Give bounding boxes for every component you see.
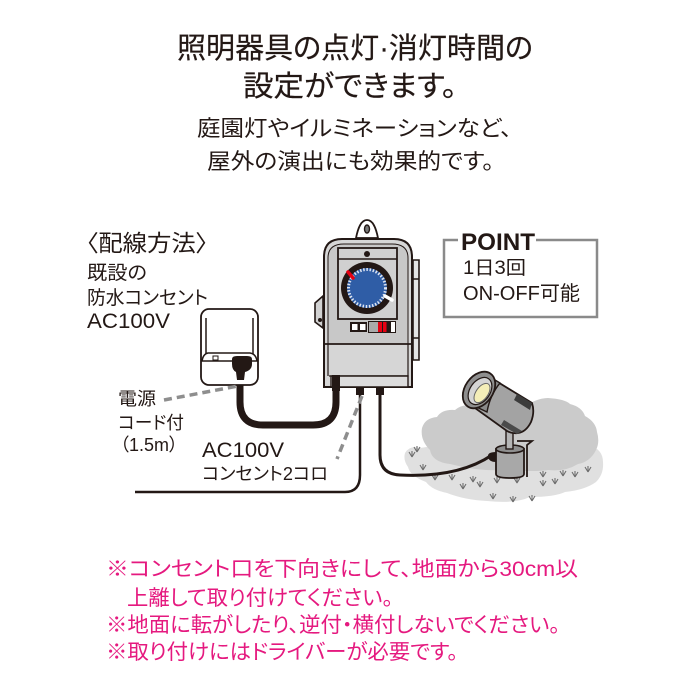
caution notes: ※コンセント口を下向きにして、地面から30cm以 — [106, 558, 578, 581]
wiring method label — [86, 230, 208, 333]
light cable — [380, 392, 492, 475]
caution notes: ※取り付けにはドライバーが必要です。 — [106, 641, 458, 664]
icon: plug — [232, 356, 252, 380]
icon: hanger — [356, 220, 378, 238]
power cord label: 電源 — [118, 389, 156, 409]
point callout: POINT — [461, 229, 535, 256]
wiring method label: 既設の — [87, 263, 147, 284]
title: 照明器具の点灯·消灯時間の — [177, 32, 533, 65]
outlet label: コンセント2コロ — [202, 464, 328, 484]
wiring method label: 〈配線方法〉 — [86, 230, 208, 256]
point callout: 1日3回 — [463, 258, 526, 279]
timer box — [315, 220, 419, 395]
title: 設定ができます。 — [243, 70, 457, 103]
point callout — [444, 229, 597, 317]
wiring method label: 防水コンセント — [87, 287, 208, 309]
power cord label: （1.5m） — [120, 435, 178, 455]
title — [177, 32, 533, 103]
point callout: ON-OFF可能 — [463, 282, 580, 305]
connectors — [332, 375, 384, 395]
switches — [350, 321, 396, 333]
outlet label — [202, 439, 328, 484]
spotlight — [456, 366, 533, 478]
wiring method label: AC100V — [87, 310, 170, 333]
caution notes: ※地面に転がしたり、逆付・横付しないでください。 — [106, 614, 560, 637]
caution notes — [106, 558, 578, 664]
ground foliage — [404, 398, 603, 502]
subtitle — [197, 116, 512, 174]
outlet cable — [135, 392, 360, 492]
subtitle: 屋外の演出にも効果的です。 — [207, 149, 494, 174]
dotted leader lines — [164, 386, 362, 459]
power cord label — [118, 389, 184, 455]
timer dial — [341, 262, 393, 314]
outlet label: AC100V — [202, 439, 284, 462]
outlet box — [201, 309, 258, 385]
power cord label: コード付 — [118, 413, 184, 433]
power cord — [240, 365, 336, 425]
caution notes: 上離して取り付けてください。 — [127, 587, 393, 610]
subtitle: 庭園灯やイルミネーションなど、 — [197, 116, 512, 141]
